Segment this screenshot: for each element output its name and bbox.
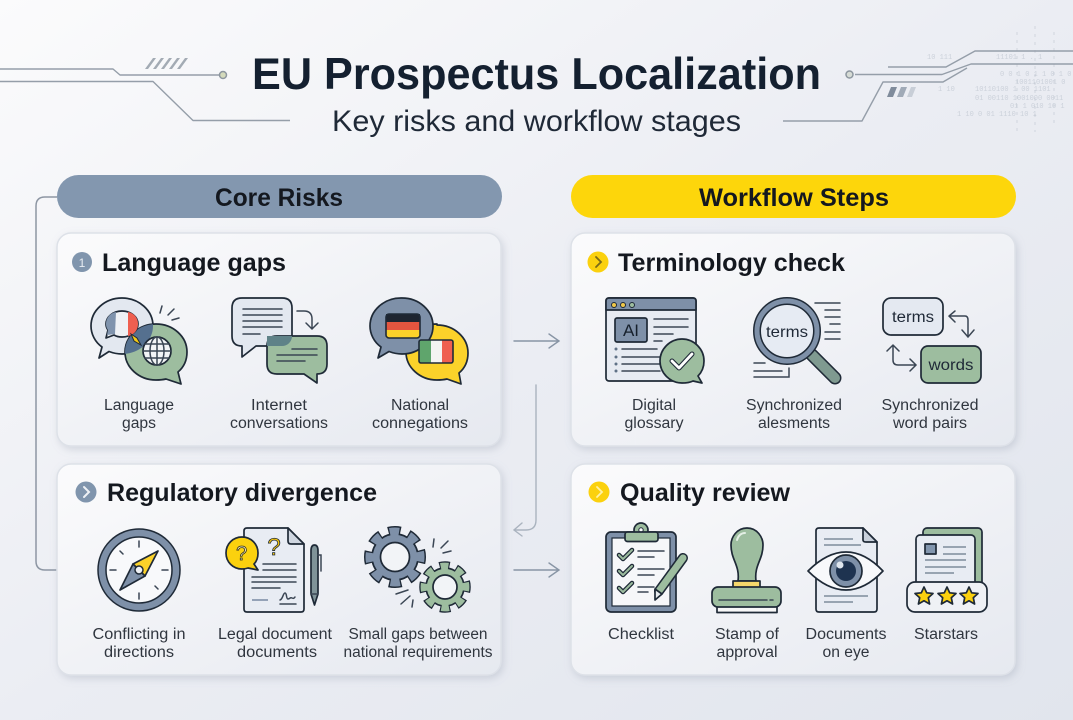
header: Workflow Steps bbox=[571, 175, 1016, 218]
icon: document with eye bbox=[808, 528, 883, 612]
icon: magnifier with terms: terms bbox=[766, 324, 808, 341]
label: Language gaps: gaps bbox=[122, 415, 156, 432]
label: Stamp of approval: Stamp of bbox=[715, 626, 780, 643]
badge: yellow chevron bbox=[588, 252, 608, 272]
label: National connegations: National bbox=[391, 397, 449, 414]
label: Internet conversations: conversations bbox=[230, 415, 328, 432]
icon: digital glossary: AI bbox=[623, 321, 639, 340]
icon: internet conversations bbox=[232, 298, 327, 383]
label: Synchronized alesments: Synchronized bbox=[746, 397, 842, 414]
right circuit decoration: 01 1 010 10 1 bbox=[1010, 103, 1065, 111]
right circuit decoration: 10 111 bbox=[927, 54, 952, 62]
panel: Language gaps bbox=[57, 233, 501, 446]
right circuit decoration: 11101 1 . 1 bbox=[996, 54, 1042, 62]
badge: slate chevron bbox=[76, 482, 96, 502]
icon: national flag bubbles bbox=[370, 298, 468, 384]
label: Starstars: Starstars bbox=[914, 626, 978, 643]
label: Conflicting in directions: directions bbox=[104, 644, 174, 661]
connector: left bracket bbox=[36, 197, 57, 570]
label: Synchronized word pairs: Synchronized bbox=[882, 397, 978, 414]
title: EU Prospectus Localization bbox=[252, 50, 821, 99]
heading: Terminology check: Terminology check bbox=[618, 249, 845, 277]
label: Small gaps between national requirements: national requirements bbox=[344, 644, 493, 661]
icon: checklist and pencil bbox=[606, 523, 683, 612]
icon: legal document with pen: ? bbox=[267, 534, 281, 561]
arrow: bottom card flow bbox=[514, 563, 559, 577]
panel: Regulatory divergence bbox=[57, 464, 501, 675]
label: Digital glossary: glossary bbox=[624, 415, 684, 432]
label: National connegations: connegations bbox=[372, 415, 468, 432]
icon: approval stamp bbox=[712, 528, 781, 612]
subtitle: Key risks and workflow stages bbox=[332, 105, 741, 138]
heading: Language gaps: Language gaps bbox=[102, 249, 286, 277]
badge: number one bbox=[72, 252, 92, 272]
right circuit decoration: 1 10 bbox=[938, 86, 955, 94]
right circuit decoration bbox=[783, 26, 1073, 135]
label: Synchronized alesments: alesments bbox=[758, 415, 830, 432]
label: Internet conversations: Internet bbox=[251, 397, 308, 414]
label: Synchronized word pairs: word pairs bbox=[892, 415, 967, 432]
label: Stamp of approval: approval bbox=[716, 644, 778, 661]
header: Workflow Steps: Workflow Steps bbox=[699, 184, 889, 212]
arrow: top card flow bbox=[514, 334, 559, 348]
panel: Terminology check bbox=[571, 233, 1015, 446]
icon: star rating bbox=[907, 528, 987, 612]
header: Core Risks: Core Risks bbox=[215, 184, 343, 212]
right circuit decoration: 01 00110 1001000 0011 bbox=[975, 95, 1063, 103]
header: Core Risks bbox=[57, 175, 502, 218]
panel: Quality review bbox=[571, 464, 1015, 675]
icon: term and word pairs: terms bbox=[892, 309, 934, 326]
label: Legal document documents: documents bbox=[237, 644, 317, 661]
heading: Quality review: Quality review bbox=[620, 479, 791, 507]
badge: yellow chevron bbox=[588, 482, 610, 502]
label: Legal document documents: Legal document bbox=[218, 626, 333, 643]
arrow: return flow bbox=[514, 385, 536, 536]
icon: digital glossary bbox=[606, 298, 704, 383]
label: Documents on eye: on eye bbox=[822, 644, 870, 661]
icon: legal document with pen: ? bbox=[236, 543, 247, 565]
right circuit decoration: 1001101001 0 bbox=[1015, 79, 1065, 87]
label: Small gaps between national requirements: Small gaps between bbox=[348, 626, 488, 643]
heading: Regulatory divergence: Regulatory divergence bbox=[107, 479, 377, 507]
icon: legal document with pen bbox=[226, 528, 321, 612]
right circuit decoration: 10110100 1 00 1101 bbox=[975, 86, 1051, 94]
icon: compass bbox=[102, 533, 176, 607]
label: Conflicting in directions: Conflicting in bbox=[92, 626, 186, 643]
icon: magnifier with terms bbox=[754, 301, 840, 378]
badge: number one: 1 bbox=[79, 256, 86, 270]
right circuit decoration: 1 10 0 01 1110 10 1 bbox=[957, 111, 1037, 119]
icon: overlapping language bubbles bbox=[91, 298, 187, 384]
icon: term and word pairs: words bbox=[927, 357, 974, 374]
icon: mismatched gears bbox=[369, 531, 466, 608]
icon: term and word pairs bbox=[883, 298, 981, 383]
left circuit decoration bbox=[0, 58, 290, 120]
label: Digital glossary: Digital bbox=[632, 397, 676, 414]
label: Checklist: Checklist bbox=[608, 626, 675, 643]
label: Language gaps: Language bbox=[104, 397, 174, 414]
label: Documents on eye: Documents bbox=[806, 626, 887, 643]
